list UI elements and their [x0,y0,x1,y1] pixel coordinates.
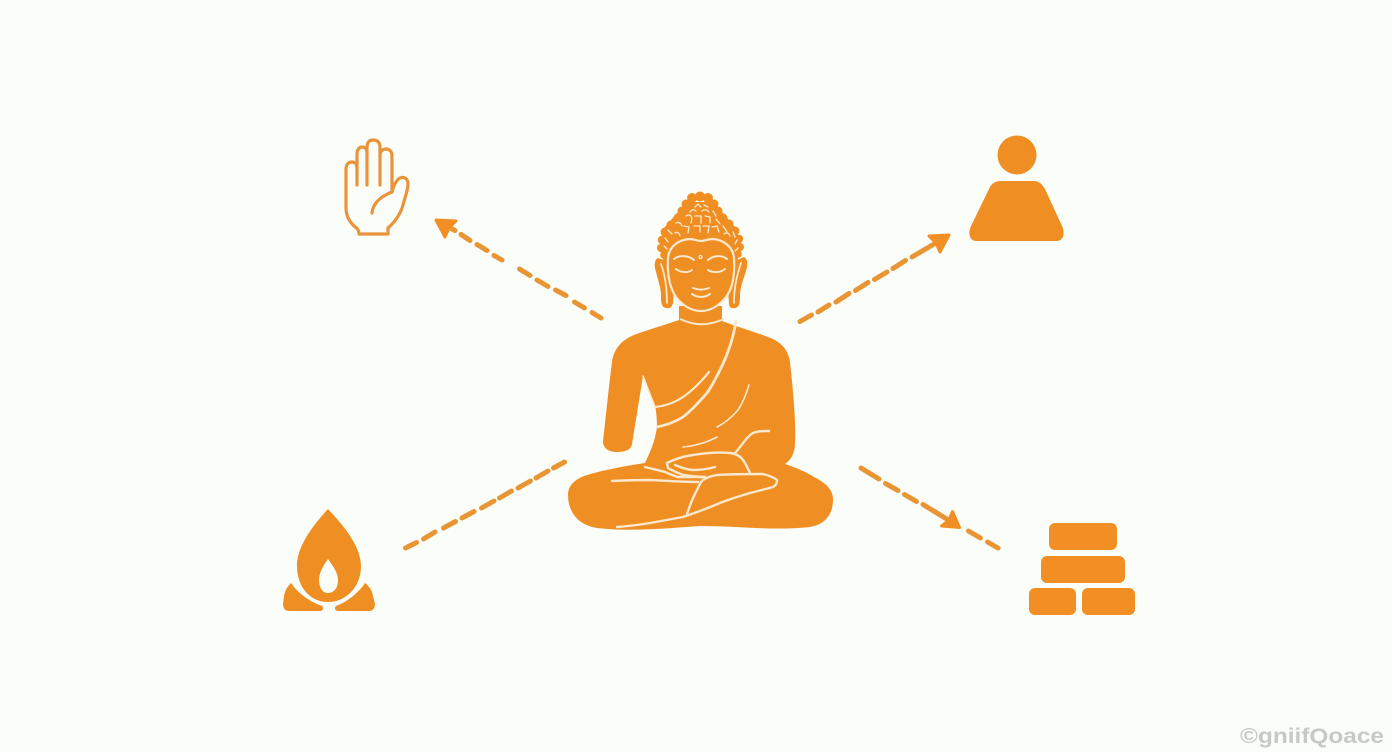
Buddha hair curls and ushnisha [657,192,744,264]
dashed arrow to person icon [800,235,949,322]
dashed arrow to bricks icon [861,468,998,548]
central figure: seated Buddha [568,192,833,530]
Buddha crossed legs and hands [612,453,777,527]
bottom left brick [1029,588,1076,615]
icon: stacked bricks [1029,523,1135,615]
flame with droplet [297,509,361,602]
Buddha face [668,239,734,311]
person head [998,136,1036,174]
person body [969,181,1064,241]
dashed line to fire icon [406,462,564,548]
Buddha body silhouette [568,306,833,530]
watermark: ©gniifQoace [1240,725,1384,748]
Buddha ears [655,257,747,308]
Buddha robe lines [643,321,769,453]
Buddha facial features [674,256,727,297]
right log [335,583,375,611]
icon: raised hand [346,140,408,234]
left log [283,583,323,611]
middle brick [1041,556,1125,583]
bottom right brick [1082,588,1135,615]
dashed arrow to hand icon [436,220,601,318]
Buddha collar line [680,319,724,324]
top brick [1049,523,1117,550]
icon: person [969,136,1064,241]
icon: fire with logs [283,509,375,611]
